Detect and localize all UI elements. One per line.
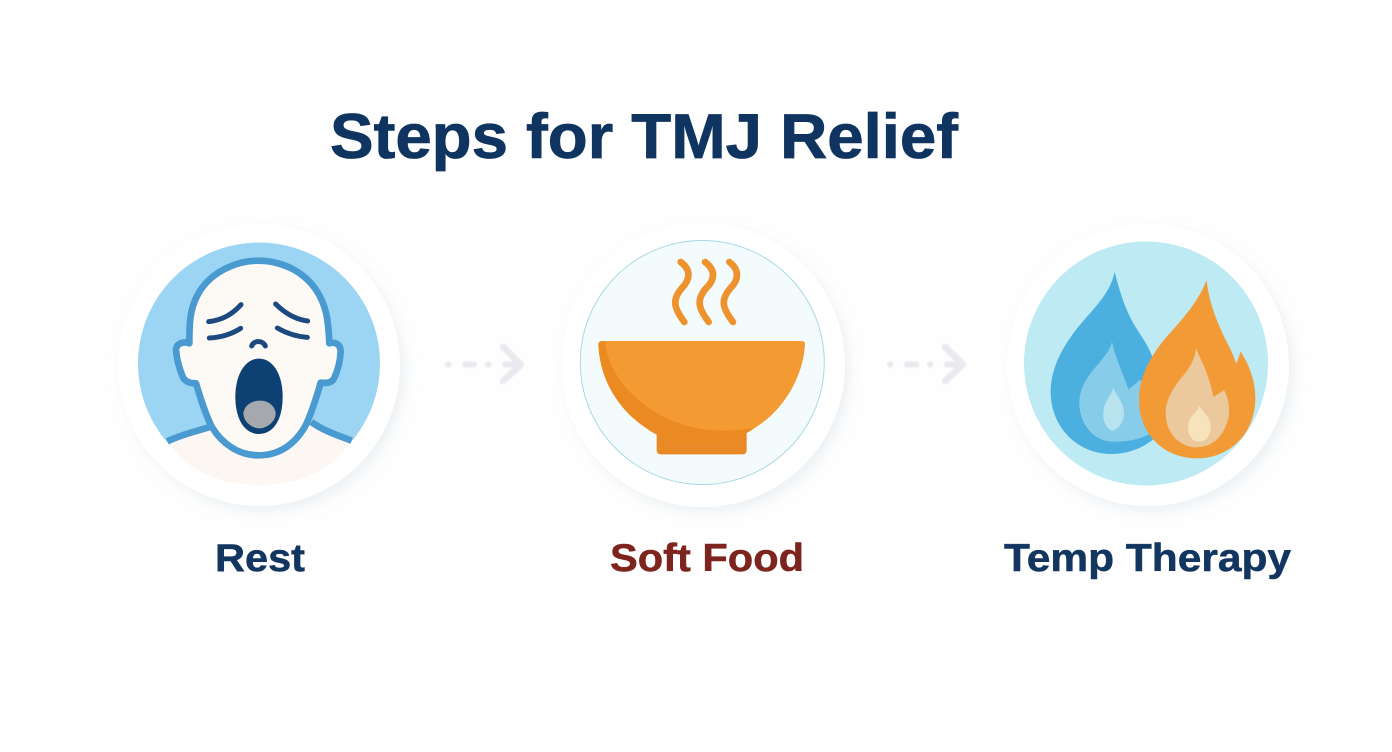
label: temp therapy: Temp Therapy: [1004, 537, 1291, 580]
panel: soft food: [561, 223, 845, 580]
panel: rest: [118, 224, 400, 580]
bowl foot: [657, 433, 747, 454]
outer disc: temp therapy: [1007, 224, 1289, 506]
shoulders: [167, 420, 352, 485]
bowl shading: [598, 342, 755, 443]
water drop: [1051, 272, 1157, 454]
title: Steps for TMJ Relief: [330, 102, 959, 172]
mouth: [235, 359, 283, 434]
arrow: rest to soft food: [448, 347, 521, 381]
label: rest: Rest: [215, 537, 305, 580]
icon: water drop and flame: [1051, 272, 1255, 458]
outer disc: rest: [118, 224, 400, 506]
nose: [252, 341, 265, 346]
circle background: soft food: [580, 240, 824, 484]
label: soft food: Soft Food: [610, 537, 804, 580]
inner flame: [1166, 348, 1229, 447]
circle background: rest: [138, 242, 380, 484]
inner drop: [1079, 342, 1150, 442]
icon: bowl with steam: [598, 262, 805, 454]
circle background: temp therapy: [1024, 242, 1268, 486]
icon: yawning face: [167, 261, 352, 485]
panel: temp therapy: [1004, 224, 1291, 580]
outer disc: soft food: [561, 223, 845, 507]
arrow: soft food to temp therapy: [890, 347, 963, 381]
bowl: [598, 341, 805, 443]
droplet: [1103, 388, 1124, 431]
steam: [675, 262, 737, 322]
head: [176, 261, 341, 455]
tongue: [243, 401, 276, 428]
eyes and brows: [209, 304, 308, 338]
flame: [1139, 280, 1255, 458]
flame core: [1188, 406, 1211, 442]
